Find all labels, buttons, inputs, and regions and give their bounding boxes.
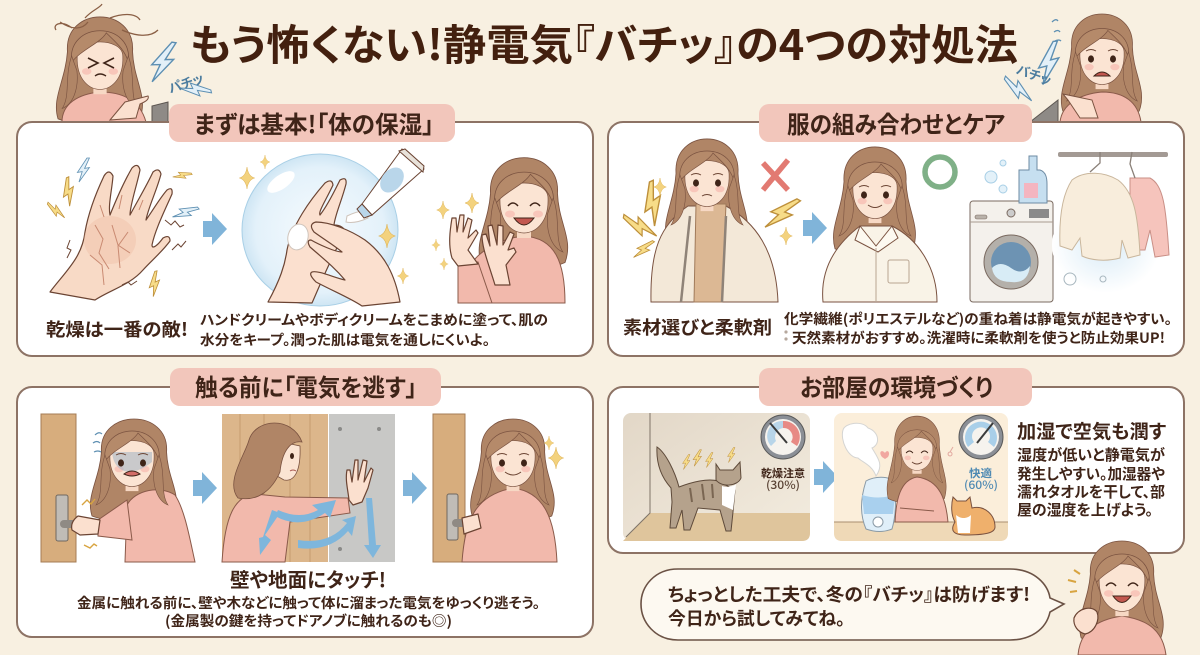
body text: 水分をキープ。潤った肌は電気を通しにくいよ。 (200, 330, 490, 350)
character: cheering woman bottom right (1068, 541, 1166, 655)
body text: 発生しやすい。加湿器や (1017, 463, 1165, 484)
icon: red cross (763, 160, 788, 190)
arrow (403, 472, 427, 504)
lead text: 乾燥は一番の敵! (46, 316, 188, 342)
icon: spark with katakana top left: パチッ (166, 68, 206, 97)
illustration: woman in cotton shirt (823, 147, 937, 302)
illustration: humidified room (834, 413, 1008, 541)
gauge: comfortable 60 percent (959, 415, 1003, 459)
arrow (814, 461, 838, 493)
gauge: dry 30 percent (761, 415, 805, 459)
heading pill: 服の組み合わせとケア (787, 105, 1005, 140)
speech bubble: ちょっとした工夫で、冬の『バチッ』は防げます! (668, 581, 1030, 607)
speech bubble: 今日から試してみてね。 (668, 605, 845, 631)
illustration: washing machine and softener (970, 156, 1053, 302)
title: もう怖くない!静電気『バチッ』の4つの対処法 (190, 12, 1018, 73)
body text (77, 593, 540, 631)
illustration: hanging sweaters (1052, 152, 1169, 293)
steam (842, 423, 880, 476)
gauge label: dry: (30%) (766, 477, 800, 493)
gauge label: comfortable: (60%) (964, 477, 998, 493)
heading pill: 触る前に「電気を逃す」 (195, 368, 417, 403)
icon: green circle (925, 157, 955, 187)
body text: 濡れタオルを干して、部 (1017, 481, 1165, 502)
panel: body moisturising (17, 104, 593, 356)
panel: room environment (608, 368, 1184, 553)
icon: spark with katakana top left (149, 40, 212, 101)
lead text: 壁や地面にタッチ! (230, 564, 386, 593)
speech bubble (641, 569, 1064, 640)
illustration: woman relaxed at the door (433, 414, 564, 562)
body text (200, 310, 548, 350)
illustration: woman afraid at the door (41, 414, 195, 562)
illustration: happy woman with smooth hands (432, 158, 568, 303)
arrow (203, 213, 227, 245)
lead text: 素材選びと柔軟剤 (623, 314, 772, 340)
body text: 金属に触れる前に、壁や木などに触って体に溜まった電気をゆっくり逃そう。 (77, 593, 540, 613)
lead text: 加湿で空気も潤す (1017, 417, 1166, 444)
gauge label: comfortable: 快適 (969, 465, 992, 481)
gauge label: dry: 乾燥注意 (761, 465, 805, 481)
icon: spark with katakana top right (1000, 41, 1061, 103)
body text: ハンドクリームやボディクリームをこまめに塗って、肌の (200, 310, 548, 330)
icon: spark with katakana top right: バチッ (1014, 59, 1054, 89)
panel: discharge electricity (17, 368, 593, 637)
body text: 天然素材がおすすめ。洗濯時に柔軟剤を使うと防止効果UP! (792, 328, 1165, 348)
arrow (803, 212, 827, 244)
heading pill: お部屋の環境づくり (800, 368, 993, 403)
panel: clothing and care (608, 104, 1184, 356)
character: woman shocked top left (55, 4, 168, 125)
humidifier (862, 477, 896, 532)
illustration: woman touching wall (222, 414, 395, 562)
gauge label: comfortable (964, 465, 998, 493)
illustration: hands with cream in bubble (239, 149, 424, 306)
illustration: dry room with cat (623, 413, 810, 541)
cat (952, 497, 995, 535)
gauge label: dry (761, 465, 805, 493)
heading pill: まずは基本!「体の保湿」 (194, 105, 434, 140)
heading pill (759, 368, 1032, 406)
body text: (金属製の鍵を持ってドアノブに触れるのも◎) (165, 611, 452, 631)
illustration: woman in fleece jacket (621, 139, 800, 302)
arrow (193, 472, 217, 504)
character: woman worried top right (1030, 14, 1142, 122)
illustration: dry hand (44, 158, 199, 300)
body text: 湿度が低いと静電気が (1017, 444, 1165, 465)
body text (1017, 444, 1165, 520)
body text: 化学繊維(ポリエステルなど)の重ね着は静電気が起きやすい。 (784, 309, 1172, 329)
body text: 屋の湿度を上げよう。 (1017, 499, 1153, 520)
body text (784, 309, 1172, 348)
